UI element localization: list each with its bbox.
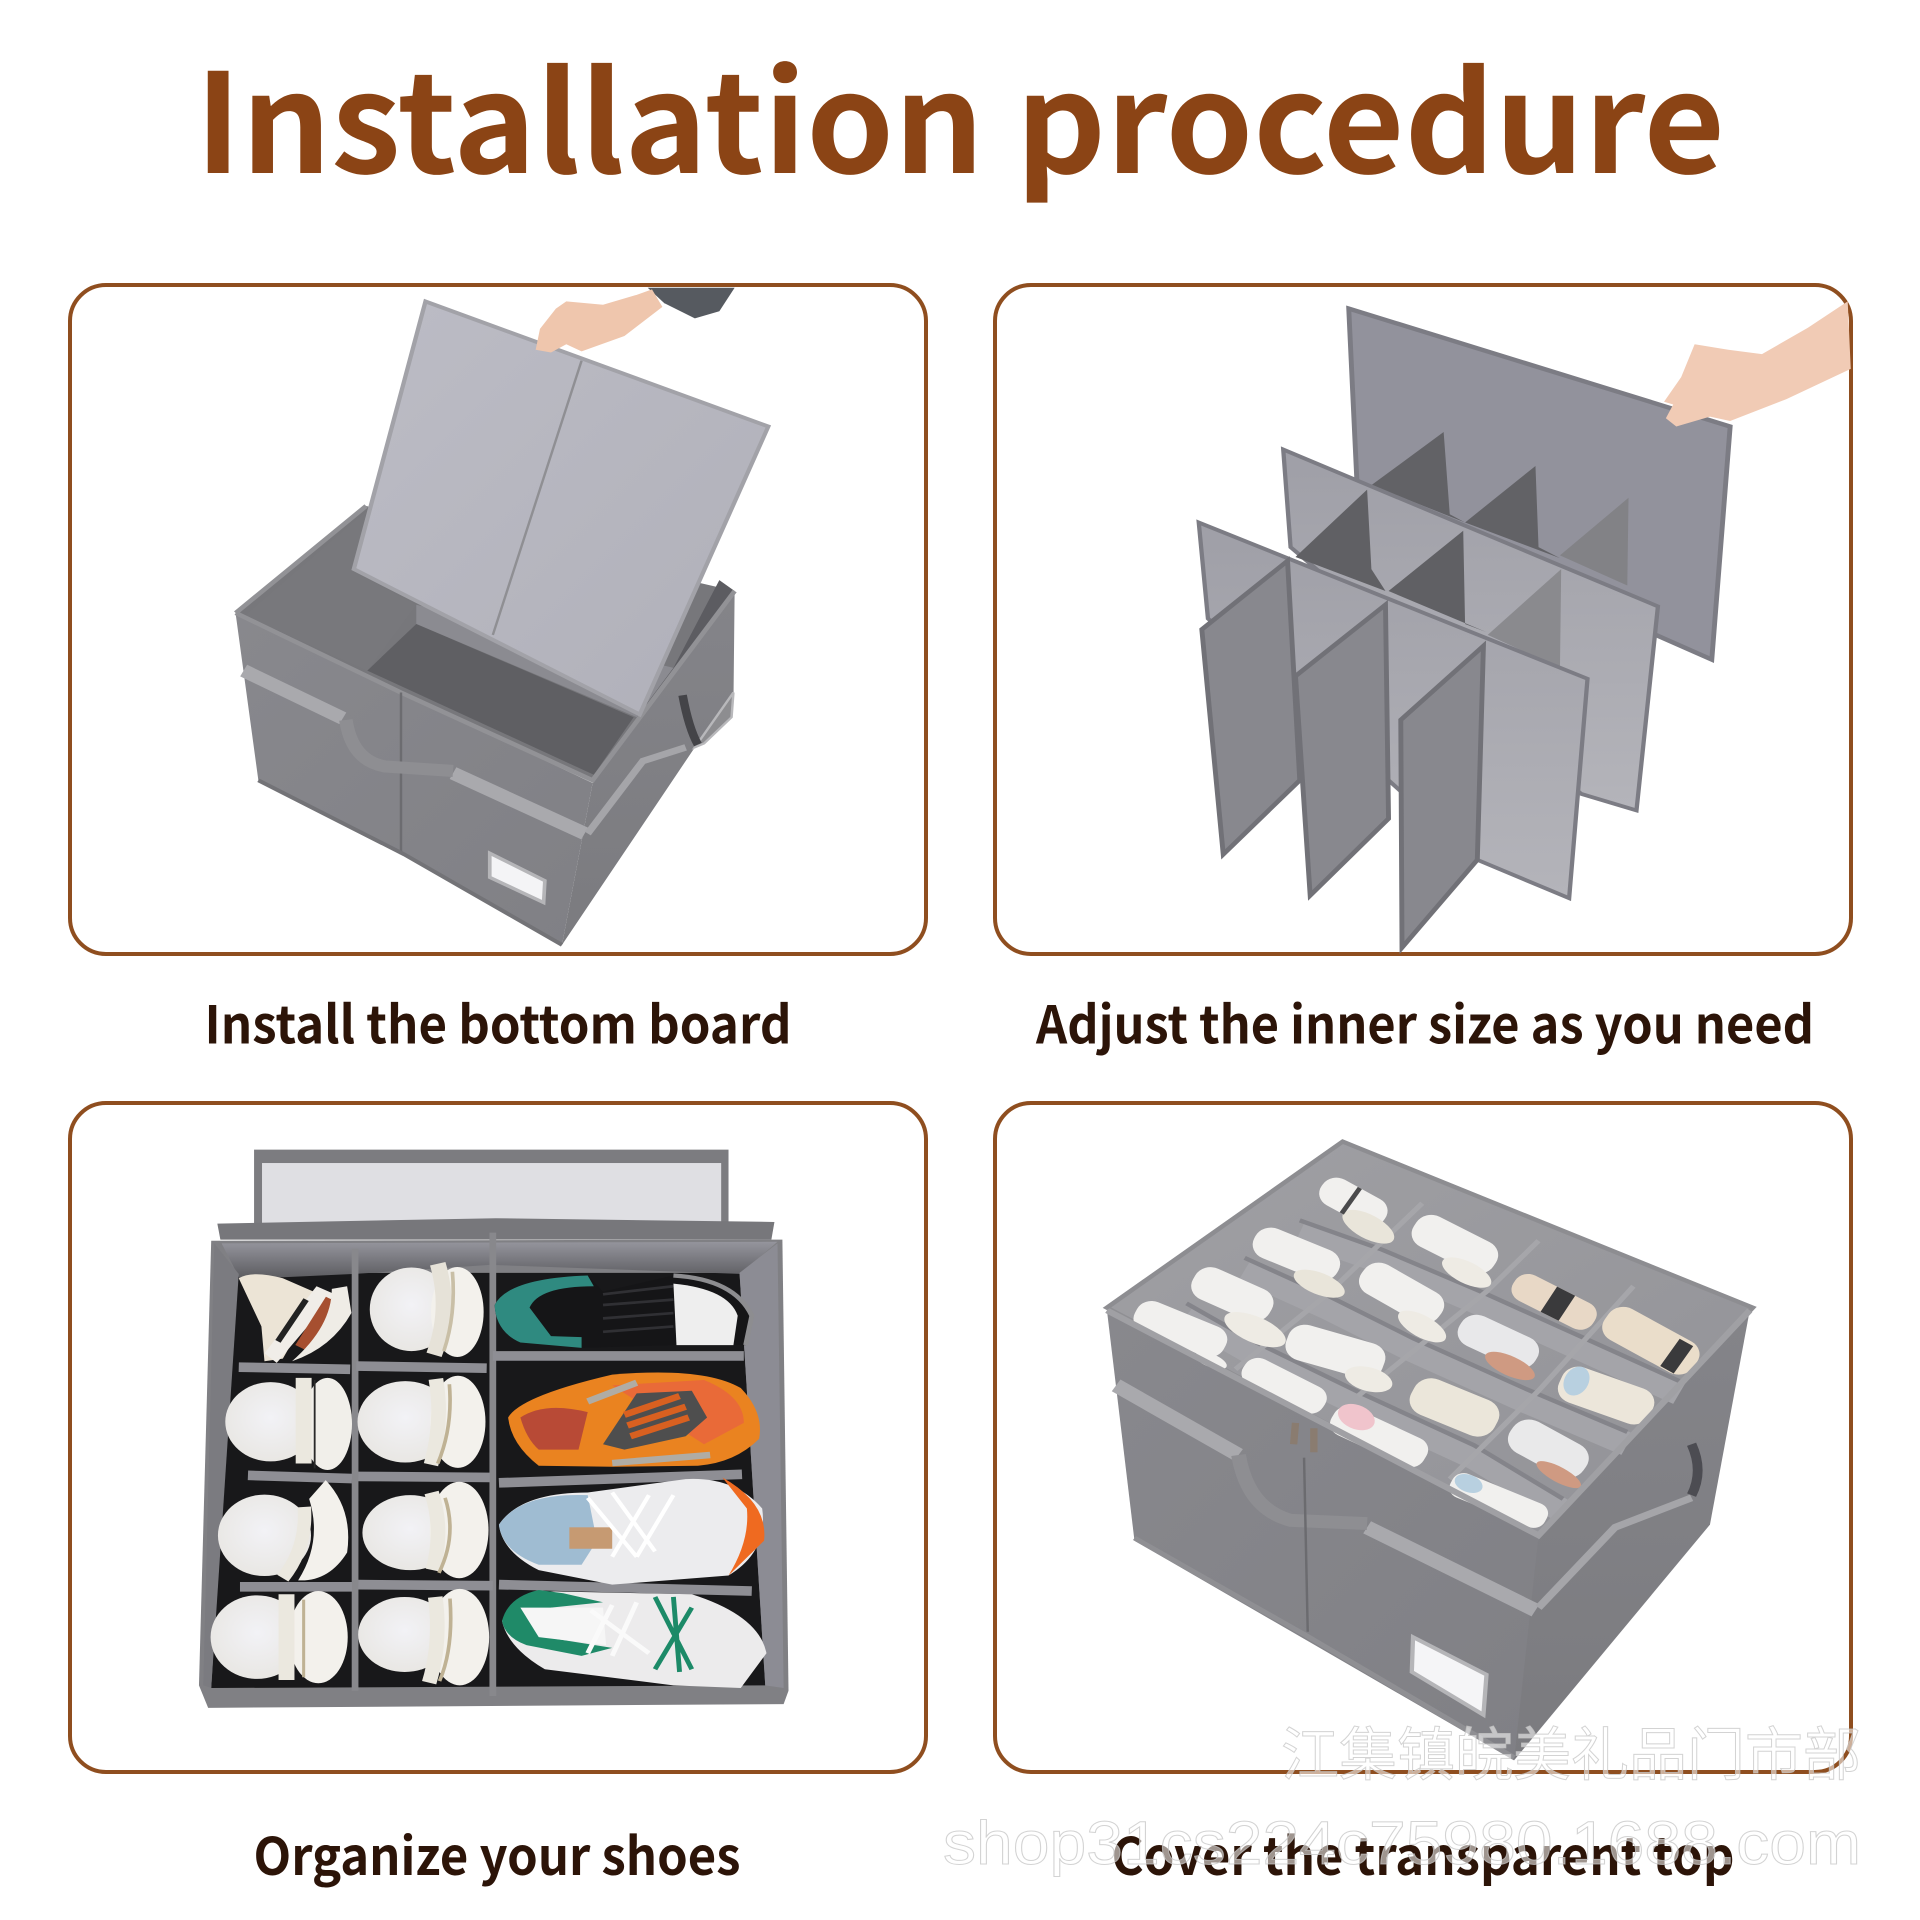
photo: divider boards [1199, 301, 1851, 948]
panel: organize your shoes [70, 1103, 926, 1772]
sneaker: white with orange [499, 1477, 764, 1585]
watermark: shop url: shop31cs224c75980.1688.com [943, 1809, 1861, 1877]
sneaker: white with green [502, 1590, 766, 1688]
caption: install the bottom board: Install the bottom board [204, 984, 792, 1058]
panel: install the bottom board [70, 285, 926, 954]
title: Installation procedure [195, 13, 1725, 213]
cell walls [1187, 1233, 1679, 1511]
hand and sleeve [536, 288, 735, 352]
panel: adjust the inner size [995, 285, 1851, 954]
caption: cover the transparent top: Cover the transparent top [1112, 1815, 1734, 1890]
white shoes [211, 1264, 489, 1685]
sneaker: orange [508, 1372, 760, 1467]
watermark: shop name: 江集镇皖美礼品门市部 [1281, 1708, 1861, 1792]
caption: organize your shoes: Organize your shoes [254, 1815, 740, 1890]
sneaker: teal and black [495, 1276, 752, 1348]
photo: open box with bottom board [236, 288, 768, 945]
photo: closed box with clear lid [1107, 1142, 1753, 1760]
photo: box with shoes from above [199, 1150, 789, 1708]
stored shoes [1125, 1172, 1706, 1531]
caption: adjust the inner size: Adjust the inner size as you need [1035, 984, 1814, 1058]
hand [1664, 301, 1851, 426]
panel: cover the transparent top [995, 1103, 1851, 1772]
